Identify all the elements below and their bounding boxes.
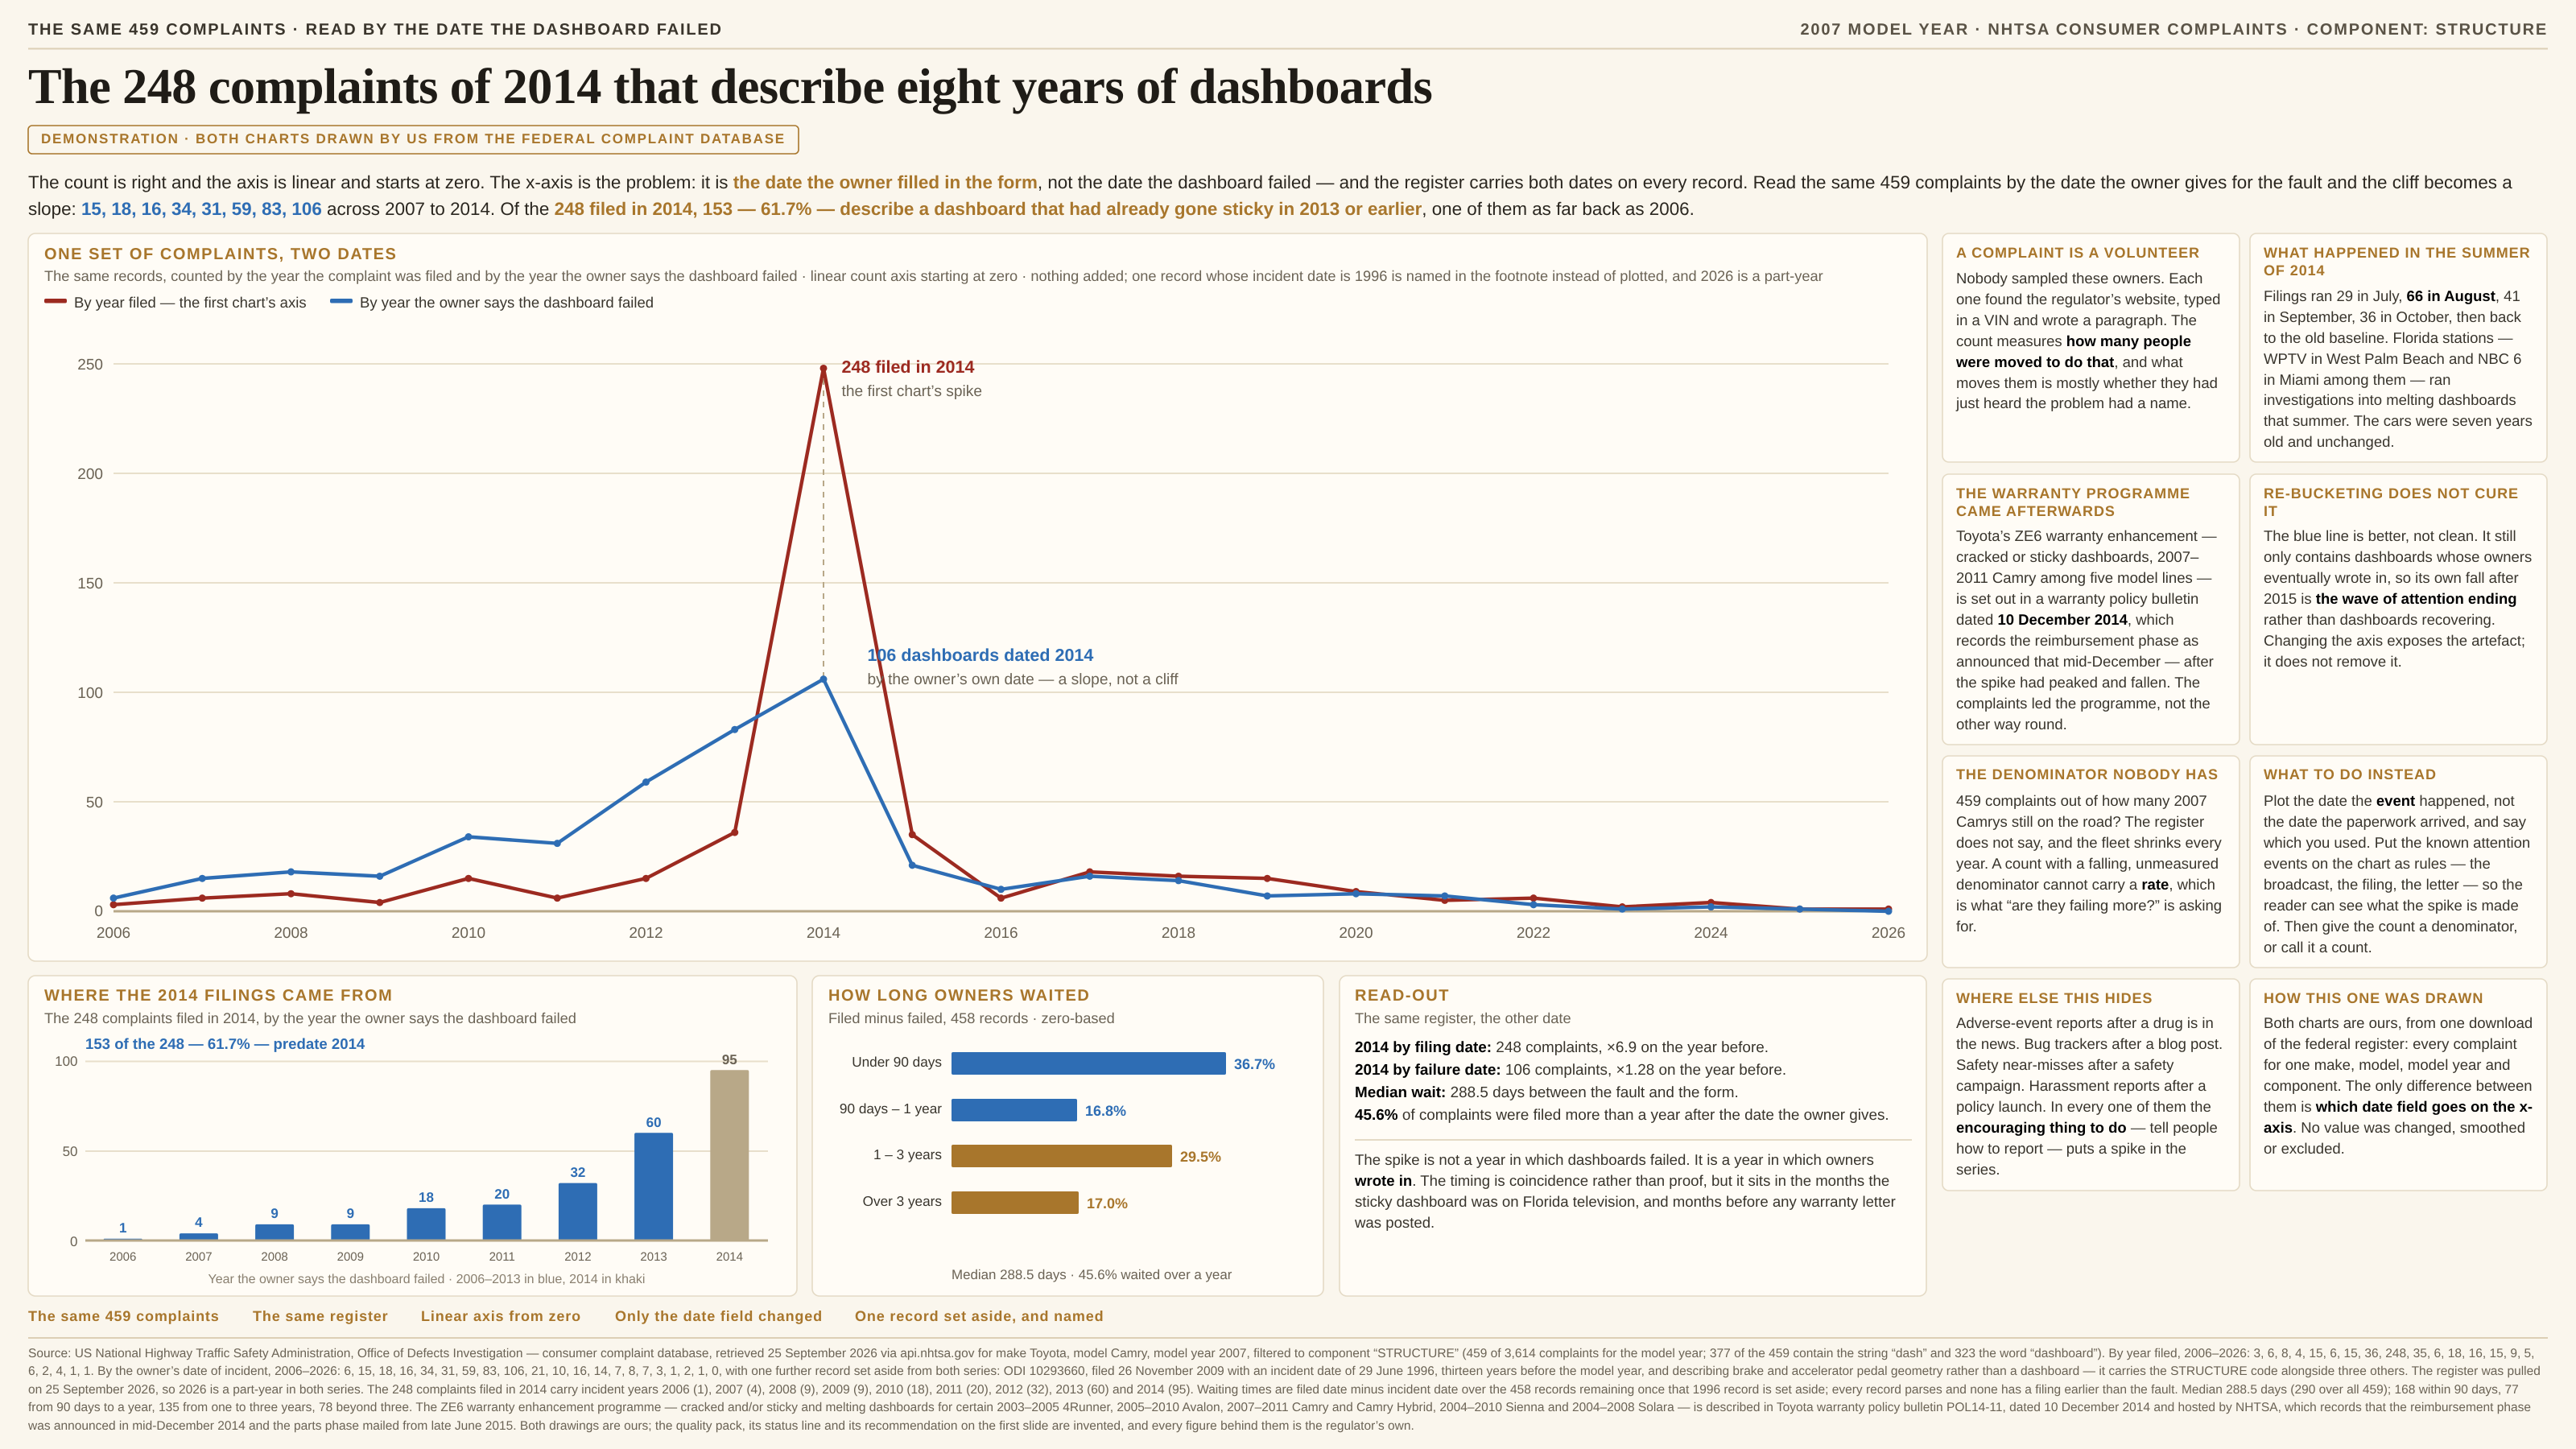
card: what to do instead bbox=[2250, 756, 2547, 968]
bar chart: 2009 bbox=[337, 1250, 364, 1264]
card: the warranty programme came afterwards: 2011 Camry among five model lines — bbox=[1956, 569, 2212, 586]
header strip bbox=[28, 21, 2548, 48]
explanation: The spike is not a year in which dashboards failed. It is a year in which owners bbox=[1355, 1151, 1874, 1168]
series: by year filed bbox=[109, 365, 1892, 913]
card: re-bucketing does not cure it: The blue line is better, not clean. It still bbox=[2264, 527, 2516, 544]
x axis labels: 2020 bbox=[1339, 925, 1373, 942]
x axis labels: 2008 bbox=[274, 925, 308, 942]
source footnote: Source: US National Highway Traffic Safety Administration, Office of Defects Investigation — consumer complaint database, retrieved 25 September 2026 via api.nhtsa.gov for make Toyota, model Camry, model year 2007, filtered to component “STRUCTURE” (459 of 3,614 complaints for the model year; 377 of the 459 contain the string “dash” and 323 the word “dashboard”). By year filed, 2006–2026: 3, 6, 8, 4, 15, 6, 15, 36, 248, 35, 6, 18, 16, 15, 9, 5, bbox=[28, 1347, 2534, 1360]
card: where else this hides: the news. Bug trackers after a blog post. bbox=[1956, 1035, 2223, 1052]
intro text: The count is right and the axis is linear and starts at zero. The x-axis is the problem: it is the date the owner filled in the form, not the date the dashboard failed — and the register carries both dates on every record. Read the same 459 complaints by the date the owner gives for the fault and the cliff becomes a bbox=[28, 172, 2512, 192]
bar chart: 100 bbox=[55, 1054, 77, 1069]
x axis labels: 2022 bbox=[1517, 925, 1550, 942]
bar chart: 2011 bbox=[489, 1250, 515, 1264]
explanation: wrote in. The timing is coincidence rather than proof, but it sits in the months the bbox=[1354, 1172, 1889, 1189]
bar chart: 2013 bbox=[640, 1250, 667, 1264]
card: the denominator nobody has bbox=[1942, 756, 2240, 968]
card: re-bucketing does not cure it bbox=[2250, 474, 2547, 745]
card: what happened in the summer of 2014: WHAT HAPPENED IN THE SUMMER bbox=[2264, 245, 2531, 261]
x axis labels: 2012 bbox=[629, 925, 663, 942]
tag row: Only the date field changed bbox=[615, 1308, 823, 1324]
explanation bbox=[1354, 1151, 1896, 1231]
card: what happened in the summer of 2014: investigations into melting dashboards bbox=[2264, 391, 2516, 408]
bar chart: 4 bbox=[195, 1215, 203, 1230]
source footnote: from 90 days to a year, 135 from one to three years, 78 beyond three. The ZE6 warranty enhancement programme — cracked and/or sticky and melting dashboards for certain 2003–2005 4Runner, 2005–2010 Avalon, 2007–2011 Camry and Camry Hybrid, 2004–2010 Sienna and 2004–2008 Solara — is described in Toyota warranty policy bulletin POL14-11, dated 10 December 2014 and hosted by NHTSA, which records that the reimbursement phase bbox=[28, 1401, 2531, 1414]
card: what happened in the summer of 2014 bbox=[2250, 233, 2547, 462]
card: a complaint is a volunteer: count measures how many people bbox=[1956, 332, 2191, 349]
card: the warranty programme came afterwards bbox=[1942, 474, 2240, 745]
key figures: Median wait: 288.5 days between the fault and the form. bbox=[1355, 1084, 1739, 1101]
card: a complaint is a volunteer: in a VIN and wrote a paragraph. The bbox=[1956, 312, 2197, 328]
panel heading: HOW LONG OWNERS WAITED bbox=[828, 987, 1090, 1005]
card: what happened in the summer of 2014: OF 2014 bbox=[2264, 262, 2325, 279]
intro text bbox=[28, 172, 2512, 219]
panel subtitle: The same records, counted by the year the complaint was filed and by the year the owner says the dashboard failed · linear count axis starting at zero · nothing added; one record whose incident date is 1996 is named in the footnote instead of plotted, and 2026 is a part-year bbox=[44, 267, 1823, 284]
bar chart: 9 bbox=[270, 1206, 279, 1221]
panel subtitle: The 248 complaints filed in 2014, by the year the owner says the dashboard failed bbox=[44, 1009, 576, 1026]
callout: 106 dated: 106 dashboards dated 2014 bbox=[868, 646, 1093, 665]
card: what to do instead: Plot the date the event happened, not bbox=[2264, 792, 2515, 809]
panel: where the 2014 filings came from bbox=[28, 976, 797, 1296]
card: the warranty programme came afterwards: records the reimbursement phase as bbox=[1956, 632, 2198, 649]
card: what happened in the summer of 2014: Filings ran 29 in July, 66 in August, 41 bbox=[2264, 287, 2520, 304]
card: the denominator nobody has: is what “are they failing more?” is asking bbox=[1956, 897, 2222, 914]
bar chart: 20 bbox=[494, 1187, 510, 1202]
card: what happened in the summer of 2014: in September, 36 in October, then back bbox=[2264, 308, 2522, 325]
bar chart bbox=[55, 1052, 768, 1286]
card: the denominator nobody has: Camrys still on the road? The register bbox=[1956, 813, 2204, 830]
card: how this one was drawn: of the federal register: every complaint bbox=[2264, 1035, 2517, 1052]
x axis labels: 2006 bbox=[97, 925, 130, 942]
horizontal bars: Under 90 days bbox=[852, 1054, 942, 1070]
key figures: 2014 by filing date: 248 complaints, ×6.9 on the year before. bbox=[1355, 1039, 1769, 1056]
card: the warranty programme came afterwards: complaints led the programme, not the bbox=[1956, 695, 2211, 712]
card: how this one was drawn: them is which date field goes on the x- bbox=[2264, 1098, 2533, 1115]
tag row: Linear axis from zero bbox=[421, 1308, 581, 1324]
bar chart: 18 bbox=[419, 1190, 434, 1205]
badge: demonstration bbox=[28, 126, 799, 154]
card: a complaint is a volunteer: moves them is mostly whether they had bbox=[1956, 374, 2218, 391]
card: what to do instead: WHAT TO DO INSTEAD bbox=[2264, 766, 2437, 782]
callout: 106 dated: by the owner’s own date — a slope, not a cliff bbox=[868, 671, 1179, 688]
bar chart: 9 bbox=[347, 1206, 354, 1221]
card: how this one was drawn: axis. No value was changed, smoothed bbox=[2264, 1119, 2525, 1136]
card: the warranty programme came afterwards: dated 10 December 2014, which bbox=[1956, 611, 2174, 628]
y axis labels bbox=[77, 357, 103, 920]
x axis labels: 2018 bbox=[1162, 925, 1195, 942]
panel: read-out bbox=[1340, 976, 1926, 1296]
horizontal bars: 17.0% bbox=[1087, 1195, 1128, 1212]
card: re-bucketing does not cure it: it does not remove it. bbox=[2264, 653, 2402, 670]
tag row bbox=[28, 1308, 1104, 1324]
y axis labels: 150 bbox=[77, 576, 103, 592]
y axis labels: 50 bbox=[86, 795, 103, 811]
badge: demonstration: DEMONSTRATION · BOTH CHARTS DRAWN BY US FROM THE FEDERAL COMPLAINT DATABASE bbox=[41, 131, 786, 147]
intro text: slope: 15, 18, 16, 34, 31, 59, 83, 106 across 2007 to 2014. Of the 248 filed in 2014, 153 — 61.7% — describe a dashboard that had already gone sticky in 2013 or earlier, one of them as far back as 2006. bbox=[28, 199, 1695, 219]
series: by year of failure bbox=[109, 675, 1892, 914]
card: the warranty programme came afterwards: announced that mid-December — after bbox=[1956, 653, 2214, 670]
horizontal bars: 1 – 3 years bbox=[873, 1146, 942, 1162]
key figures: 45.6% of complaints were filed more than a year after the date the owner gives. bbox=[1355, 1107, 1889, 1124]
card: what to do instead: which you used. Put the known attention bbox=[2263, 834, 2530, 851]
x axis labels: 2026 bbox=[1872, 925, 1905, 942]
annotation: 153 of the 248 — 61.7% — predate 2014 bbox=[85, 1035, 365, 1052]
card: what to do instead: or call it a count. bbox=[2264, 939, 2372, 956]
card: the warranty programme came afterwards: is set out in a warranty policy bulletin bbox=[1956, 590, 2198, 607]
card: what to do instead: the date the paperwork arrived, and say bbox=[2264, 813, 2527, 830]
panel subtitle: Filed minus failed, 458 records · zero-based bbox=[828, 1009, 1115, 1026]
horizontal bars: 90 days – 1 year bbox=[840, 1100, 942, 1117]
panel heading: ONE SET OF COMPLAINTS, TWO DATES bbox=[44, 246, 397, 263]
card: re-bucketing does not cure it: Changing the axis exposes the artefact; bbox=[2264, 632, 2525, 649]
card: the denominator nobody has: year. A count with a falling, unmeasured bbox=[1956, 855, 2219, 872]
callout: 248 filed: the first chart’s spike bbox=[842, 383, 982, 400]
card: a complaint is a volunteer: A COMPLAINT IS A VOLUNTEER bbox=[1956, 245, 2200, 261]
bar chart: 2012 bbox=[564, 1250, 592, 1264]
card: the denominator nobody has: denominator cannot carry a rate, which bbox=[1956, 876, 2215, 893]
card: where else this hides: WHERE ELSE THIS HIDES bbox=[1956, 990, 2153, 1006]
callout: 106 dated bbox=[868, 646, 1179, 688]
bar chart: 50 bbox=[63, 1144, 77, 1159]
card: what happened in the summer of 2014: old and unchanged. bbox=[2264, 433, 2395, 450]
card: where else this hides: how to report — puts a spike in the bbox=[1956, 1140, 2186, 1157]
callout: 248 filed bbox=[842, 357, 982, 400]
card: how this one was drawn: component. The only difference between bbox=[2264, 1077, 2533, 1094]
card: re-bucketing does not cure it: eventually wrote in, so its own fall after bbox=[2264, 569, 2519, 586]
card: the warranty programme came afterwards: other way round. bbox=[1956, 716, 2067, 733]
header strip: 2007 MODEL YEAR · NHTSA CONSUMER COMPLAINTS · COMPONENT: STRUCTURE bbox=[1800, 21, 2548, 39]
bar chart: 0 bbox=[70, 1234, 77, 1249]
card: where else this hides: series. bbox=[1956, 1161, 2000, 1178]
card: the warranty programme came afterwards: Toyota’s ZE6 warranty enhancement — bbox=[1956, 527, 2217, 544]
card: the denominator nobody has: for. bbox=[1956, 918, 1977, 935]
bar chart: 32 bbox=[570, 1165, 585, 1180]
panel heading: READ-OUT bbox=[1355, 987, 1450, 1005]
source footnote: was announced in mid-December 2014 and the parts phase mailed from late June 2015. Both drawings are ours; the quality pack, its status line and its recommendation on the first slide are invented, and every figure behind them is the regulator’s own. bbox=[27, 1419, 1414, 1433]
bar chart: 95 bbox=[722, 1052, 737, 1067]
card: how this one was drawn bbox=[2250, 979, 2547, 1191]
horizontal bars: 16.8% bbox=[1085, 1103, 1126, 1119]
card: what to do instead: reader can see what the spike is made bbox=[2264, 897, 2519, 914]
legend: By year the owner says the dashboard failed bbox=[360, 294, 654, 311]
panel: how long owners waited bbox=[812, 976, 1323, 1296]
bar chart: 60 bbox=[646, 1115, 662, 1130]
y axis labels: 200 bbox=[77, 466, 103, 483]
x axis labels bbox=[97, 925, 1905, 942]
card: where else this hides: encouraging thing to do — tell people bbox=[1956, 1119, 2218, 1136]
card: where else this hides: Safety near-misses after a safety bbox=[1956, 1056, 2174, 1073]
card: what happened in the summer of 2014: in Miami among them — ran bbox=[2264, 371, 2450, 388]
card: where else this hides: Adverse-event reports after a drug is in bbox=[1956, 1014, 2214, 1031]
card: what happened in the summer of 2014: WPTV in West Palm Beach and NBC 6 bbox=[2264, 350, 2521, 367]
connector between peaks bbox=[823, 368, 824, 679]
bar chart: 2014 bbox=[716, 1250, 743, 1264]
note: Median 288.5 days · 45.6% waited over a year bbox=[952, 1267, 1232, 1282]
callout: 248 filed: 248 filed in 2014 bbox=[842, 357, 974, 377]
explanation: was posted. bbox=[1354, 1214, 1435, 1231]
card: the warranty programme came afterwards: THE WARRANTY PROGRAMME bbox=[1956, 485, 2190, 502]
card: a complaint is a volunteer bbox=[1942, 233, 2240, 462]
card: what to do instead: broadcast, the filing, the letter — so the bbox=[2264, 876, 2523, 893]
tag row: The same 459 complaints bbox=[28, 1308, 220, 1324]
card: the denominator nobody has: does not say, and the fleet shrinks every bbox=[1956, 834, 2223, 851]
card: the denominator nobody has: THE DENOMINATOR NOBODY HAS bbox=[1956, 766, 2219, 782]
card: a complaint is a volunteer: were moved to do that, and what bbox=[1955, 353, 2183, 370]
card: a complaint is a volunteer: Nobody sampled these owners. Each bbox=[1956, 270, 2202, 287]
chart: complaints by year bbox=[77, 357, 1905, 942]
card: what to do instead: events on the chart as rules — the bbox=[2264, 855, 2491, 872]
source footnote: on 25 September 2026, so 2026 is a part-year in both series. The 248 complaints filed in 2014 carry incident years 2006 (1), 2007 (4), 2008 (9), 2009 (9), 2010 (18), 2011 (20), 2012 (32), 2013 (60) and 2014 (95). Waiting times are filed date minus incident date over the 458 records remaining once that 1996 record is set aside; every record parses and none has a filing earlier than the fault. Median 288.5 days (290 over all 459); 168 within 90 days, 77 bbox=[28, 1383, 2519, 1397]
card: what happened in the summer of 2014: to the old baseline. Florida stations — bbox=[2264, 329, 2513, 346]
card: the warranty programme came afterwards: CAME AFTERWARDS bbox=[1956, 503, 2116, 519]
legend bbox=[44, 294, 654, 311]
title: The 248 complaints of 2014 that describe eight years of dashboards bbox=[28, 59, 1432, 114]
horizontal bars: 29.5% bbox=[1180, 1149, 1221, 1165]
source footnote bbox=[27, 1338, 2548, 1433]
axis caption: Year the owner says the dashboard failed · 2006–2013 in blue, 2014 in khaki bbox=[208, 1273, 645, 1286]
x axis labels: 2010 bbox=[452, 925, 485, 942]
horizontal bars: Over 3 years bbox=[863, 1193, 942, 1209]
card: a complaint is a volunteer: just heard the problem had a name. bbox=[1955, 394, 2191, 411]
y axis labels: 250 bbox=[77, 357, 103, 374]
bar chart: 1 bbox=[119, 1220, 126, 1236]
bar chart: 2010 bbox=[413, 1250, 440, 1264]
card: a complaint is a volunteer: one found the regulator’s website, typed bbox=[1956, 291, 2220, 308]
source footnote: 6, 2, 4, 1, 1. By the owner’s date of incident, 2006–2026: 6, 15, 18, 16, 34, 31, 59, 83, 106, 21, 10, 16, 14, 7, 8, 7, 3, 1, 2, 1, 0, with one further record set aside from both series: ODI 10293660, filed 26 November 2009 with an incident date of 29 June 1996, thirteen years before the model year, and describing brake and accelerator pedal geometry rather than a dashboard — it carries the STRUCTURE code alongside three others. The register was pulled bbox=[28, 1364, 2541, 1378]
header strip: THE SAME 459 COMPLAINTS · READ BY THE DATE THE DASHBOARD FAILED bbox=[28, 21, 723, 39]
panel: line chart bbox=[28, 233, 1927, 961]
card: where else this hides: campaign. Harassment reports after a bbox=[1956, 1077, 2207, 1094]
card: re-bucketing does not cure it: rather than dashboards recovering. bbox=[2264, 611, 2496, 628]
panel subtitle: The same register, the other date bbox=[1355, 1009, 1571, 1026]
key figures bbox=[1355, 1039, 1889, 1124]
card: what to do instead: of. Then give the count a denominator, bbox=[2264, 918, 2517, 935]
x axis labels: 2014 bbox=[807, 925, 841, 942]
y axis labels: 100 bbox=[77, 685, 103, 702]
y axis labels: 0 bbox=[94, 903, 103, 920]
horizontal bars bbox=[840, 1052, 1275, 1214]
card: re-bucketing does not cure it: IT bbox=[2264, 503, 2278, 519]
card: re-bucketing does not cure it: RE-BUCKETING DOES NOT CURE bbox=[2264, 485, 2519, 502]
legend: By year filed — the first chart’s axis bbox=[74, 294, 307, 311]
key figures: 2014 by failure date: 106 complaints, ×1.28 on the year before. bbox=[1355, 1062, 1786, 1079]
card: re-bucketing does not cure it: 2015 is the wave of attention ending bbox=[2264, 590, 2517, 607]
card: how this one was drawn: for one make, model, model year and bbox=[2264, 1056, 2510, 1073]
bar chart: 2007 bbox=[185, 1250, 213, 1264]
card: where else this hides bbox=[1942, 979, 2240, 1191]
tag row: The same register bbox=[253, 1308, 389, 1324]
x axis labels: 2016 bbox=[984, 925, 1018, 942]
panel heading: WHERE THE 2014 FILINGS CAME FROM bbox=[44, 987, 393, 1005]
horizontal bars: 36.7% bbox=[1234, 1056, 1275, 1072]
card: the warranty programme came afterwards: cracked or sticky dashboards, 2007– bbox=[1956, 548, 2199, 565]
card: how this one was drawn: or excluded. bbox=[2264, 1140, 2345, 1157]
tag row: One record set aside, and named bbox=[855, 1308, 1104, 1324]
x axis labels: 2024 bbox=[1694, 925, 1728, 942]
card: where else this hides: policy launch. In every one of them the bbox=[1956, 1098, 2211, 1115]
bar chart: 2006 bbox=[109, 1250, 136, 1264]
card: the warranty programme came afterwards: the spike had peaked and fallen. The bbox=[1956, 674, 2200, 691]
card: re-bucketing does not cure it: only contains dashboards whose owners bbox=[2264, 548, 2532, 565]
card: how this one was drawn: HOW THIS ONE WAS DRAWN bbox=[2264, 990, 2483, 1006]
explanation: sticky dashboard was on Florida television, and months before any warranty letter bbox=[1355, 1193, 1896, 1210]
card: how this one was drawn: Both charts are ours, from one download bbox=[2264, 1014, 2533, 1031]
bar chart: 2008 bbox=[261, 1250, 288, 1264]
card: what happened in the summer of 2014: that summer. The cars were seven years bbox=[2264, 412, 2533, 429]
card: the denominator nobody has: 459 complaints out of how many 2007 bbox=[1956, 792, 2207, 809]
